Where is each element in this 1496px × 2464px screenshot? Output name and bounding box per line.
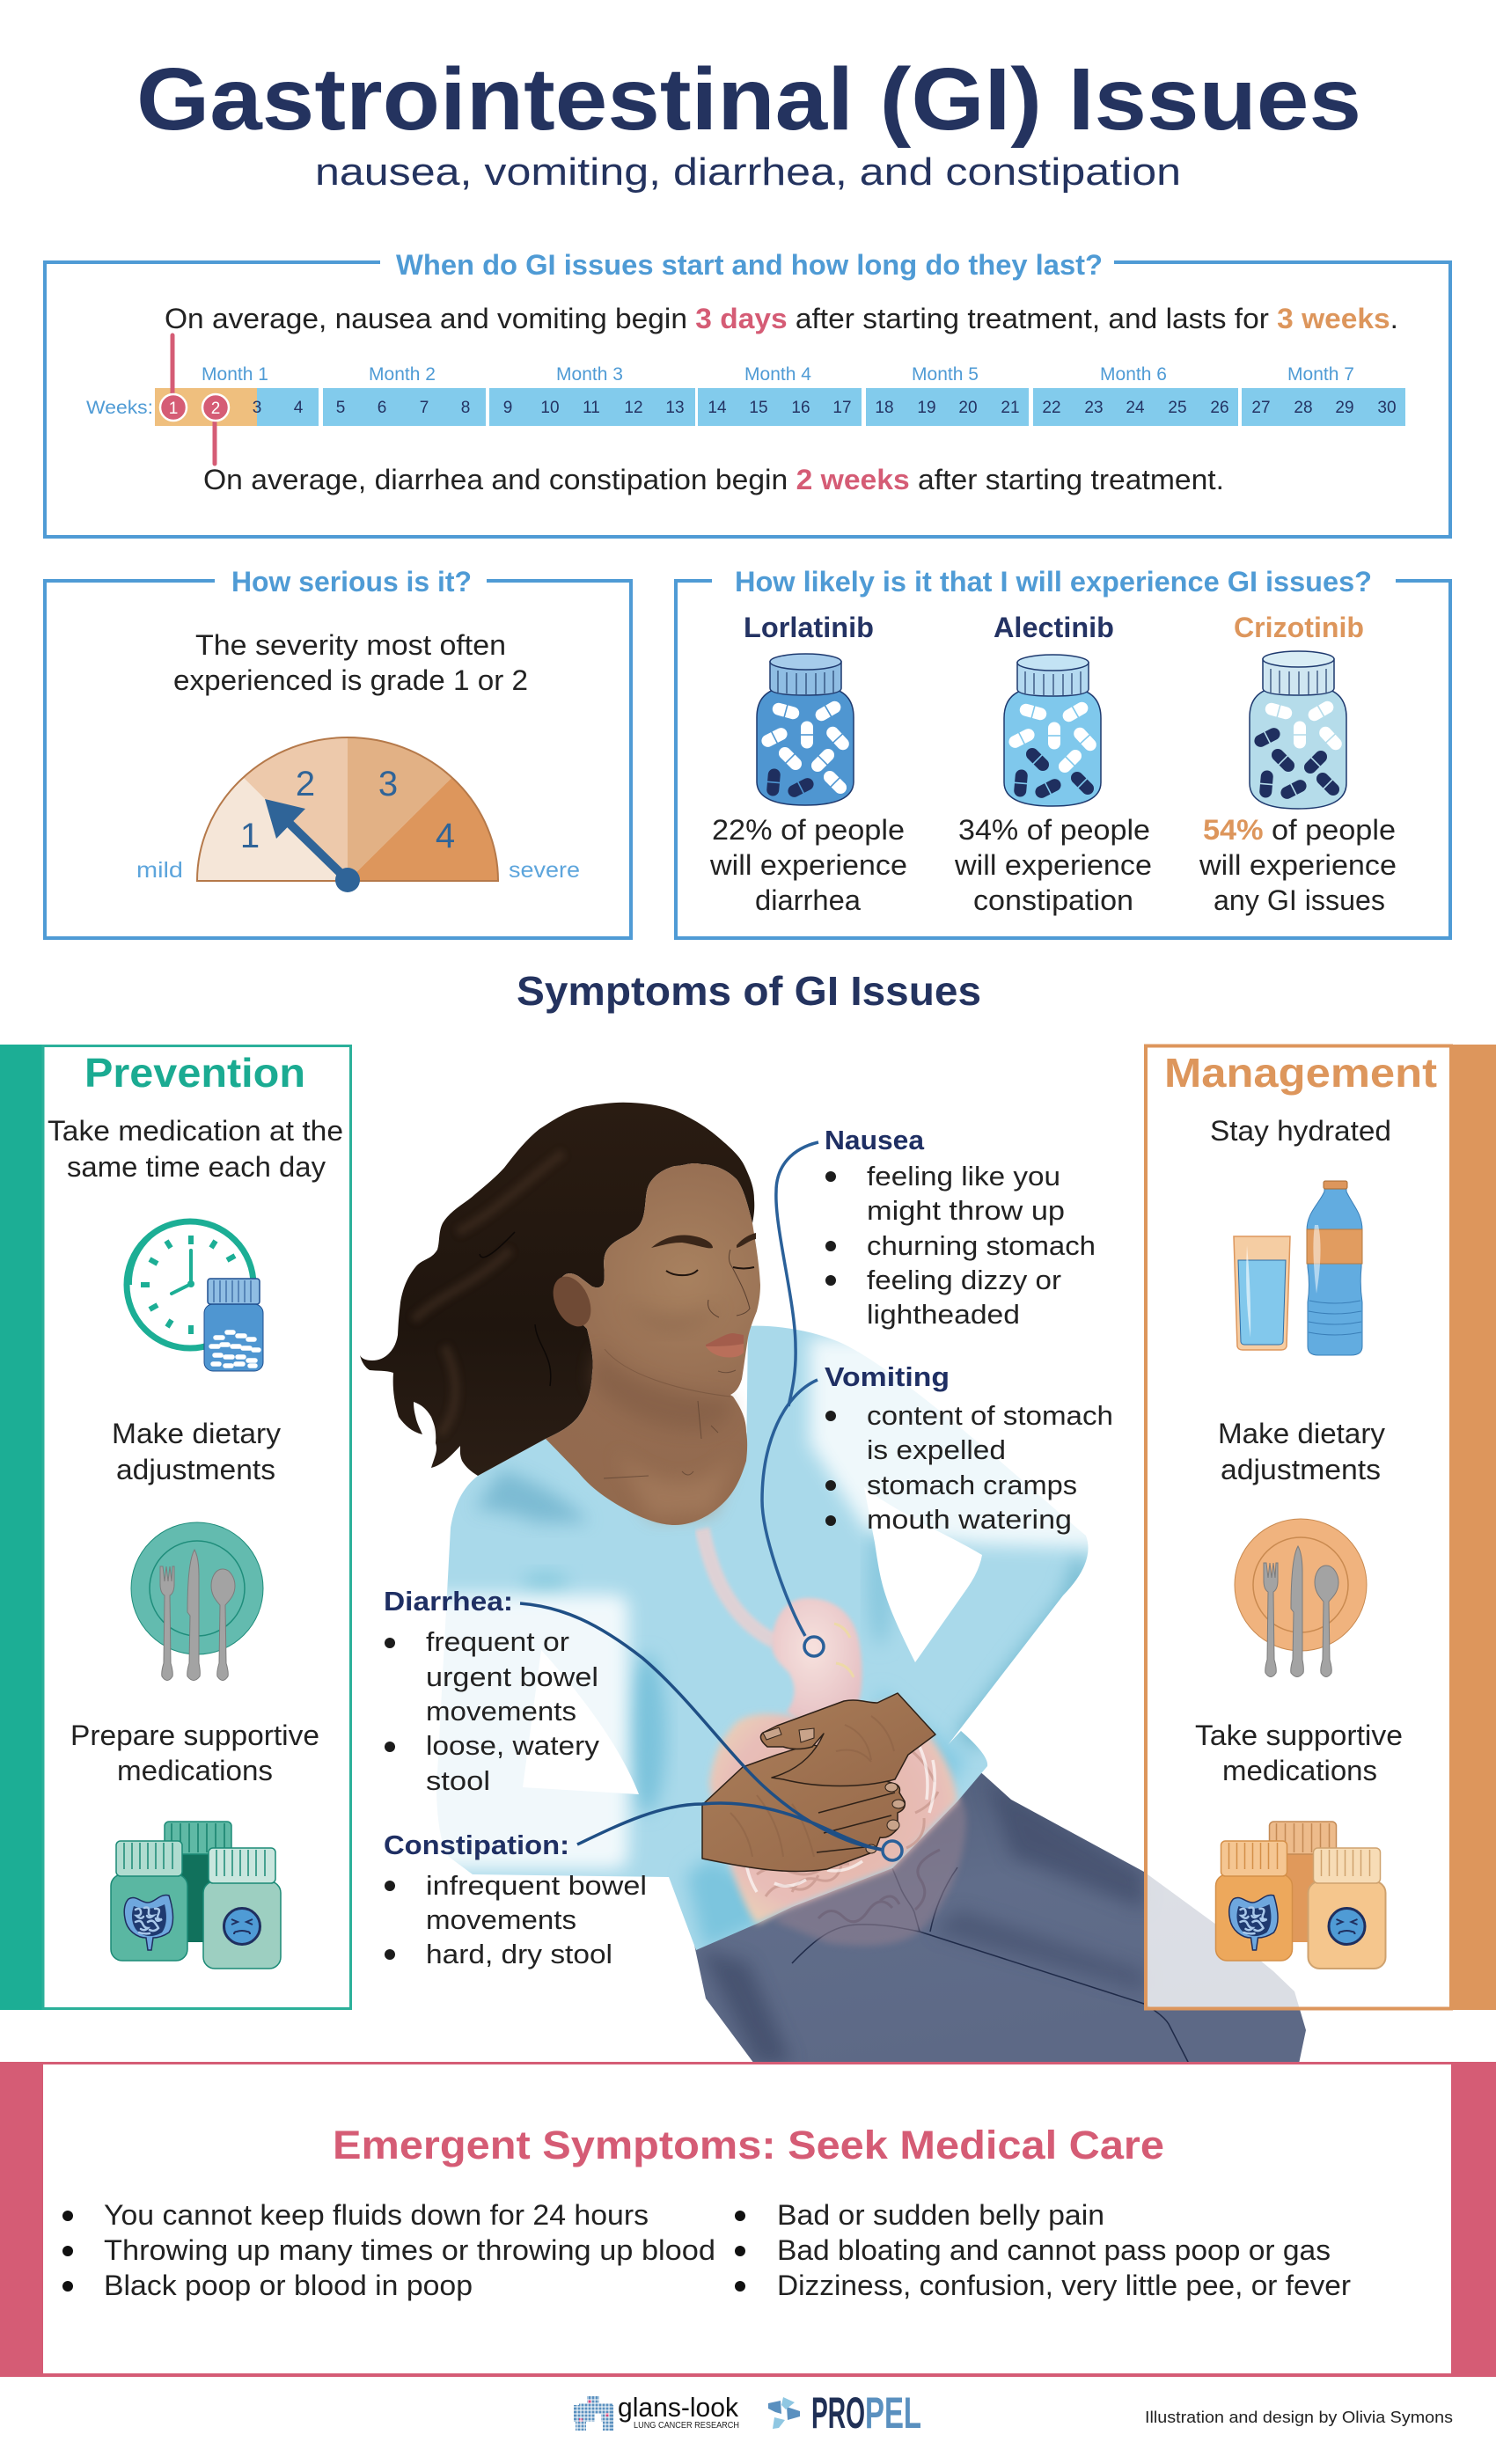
icon: medication bottles [111, 1822, 281, 1969]
heading: emergent symptoms: Emergent Symptoms: Seek Medical Care [333, 2123, 1164, 2167]
timeline bar: 23 [1084, 399, 1104, 417]
text: dietary: adjustments [116, 1454, 275, 1485]
callout: constipation [384, 1830, 647, 1969]
text: nausea timing: On average, nausea and vomiting begin 3 days after starting treatment, and lasts for 3 weeks. [165, 303, 1398, 334]
timeline bar: Month 4 [744, 364, 811, 385]
timeline bar: 28 [1294, 399, 1313, 417]
icon: plate and cutlery [131, 1522, 263, 1681]
text: supportive medications: Take supportive [1195, 1720, 1403, 1751]
subtitle: nausea, vomiting, diarrhea, and constipation [315, 150, 1181, 194]
list: right column: Bad or sudden belly pain [777, 2199, 1104, 2231]
drug column: Crizotinib: any GI issues [1214, 884, 1385, 916]
drug column: Alectinib: will experience [954, 849, 1152, 881]
callout: constipation: infrequent bowel [426, 1870, 647, 1901]
severity gauge: 2 [296, 765, 315, 803]
severity gauge: 1 [240, 817, 260, 855]
panel: management [1146, 1045, 1496, 2010]
illustration: woman with digestive organs [360, 1103, 1306, 2064]
drug column: Crizotinib [1199, 612, 1397, 916]
callout: diarrhea: frequent or [426, 1626, 569, 1657]
timeline bar: 9 [503, 399, 512, 417]
white gap between arm and torso [864, 1487, 982, 1662]
upper hand [760, 1693, 935, 1786]
text: stay hydrated: Stay hydrated [1210, 1115, 1391, 1147]
list: left column: Black poop or blood in poop [104, 2270, 473, 2301]
callout: nausea: might throw up [867, 1195, 1065, 1226]
title: Gastrointestinal (GI) Issues [136, 50, 1361, 149]
list: left column: Throwing up many times or throwing up blood [104, 2234, 715, 2266]
callout: nausea: churning stomach [867, 1230, 1096, 1261]
timeline bar: 10 [540, 399, 560, 417]
timeline bar: Month 7 [1287, 364, 1354, 385]
text: take medication: Take medication at the [48, 1115, 343, 1147]
drug column: Alectinib [954, 612, 1152, 916]
callout: vomiting: is expelled [867, 1434, 1006, 1465]
drug column: Alectinib: Alectinib [994, 612, 1114, 643]
drug column: Lorlatinib: diarrhea [755, 884, 861, 916]
timeline bar: Weeks: [86, 398, 153, 418]
drug column: Lorlatinib: 22% of people [712, 814, 905, 846]
panel: emergent symptoms [0, 2062, 1496, 2377]
icon: water glass and bottle [1234, 1181, 1362, 1355]
severity gauge: severe [509, 858, 580, 883]
white haze behind vomiting text [810, 1338, 1118, 1549]
text: supportive medications: Prepare supportive [70, 1720, 319, 1751]
icon: clock with pill bottle [127, 1221, 263, 1371]
text: dietary: Make dietary [112, 1418, 281, 1449]
callout: diarrhea: movements [426, 1696, 576, 1727]
logo: glans-look: glans-look [618, 2392, 738, 2423]
heading: management: Management [1164, 1050, 1437, 1096]
drug column: Alectinib: 34% of people [958, 814, 1150, 846]
timeline bar: 25 [1168, 399, 1187, 417]
timeline bar: 24 [1126, 399, 1145, 417]
timeline bar [86, 364, 1405, 426]
timeline bar: 22 [1042, 399, 1061, 417]
timeline bar: Month 2 [369, 364, 436, 385]
callout: diarrhea: urgent bowel [426, 1661, 598, 1692]
drug column: Crizotinib: Crizotinib [1234, 612, 1364, 643]
text: severity: The severity most often [195, 629, 506, 661]
panel: prevention [0, 1045, 350, 2010]
heading: how likely: How likely is it that I will experience GI issues? [735, 566, 1372, 598]
text: supportive medications: medications [117, 1755, 273, 1786]
text: supportive medications [1195, 1720, 1403, 1786]
drug column: Lorlatinib: Lorlatinib [744, 612, 874, 643]
marker: diarrhea begins [202, 394, 229, 464]
text: dietary: adjustments [1221, 1454, 1381, 1485]
logo: glans-look: LUNG CANCER RESEARCH [634, 2421, 739, 2431]
panel: how serious [45, 566, 631, 938]
text: take medication: same time each day [67, 1151, 326, 1183]
callout: diarrhea: stool [426, 1765, 490, 1796]
list: right column: Dizziness, confusion, very little pee, or fever [777, 2270, 1351, 2301]
timeline bar: 16 [791, 399, 810, 417]
timeline bar: 17 [832, 399, 852, 417]
callout: diarrhea: loose, watery [426, 1730, 600, 1761]
heading: timing: When do GI issues start and how long do they last? [396, 249, 1103, 281]
timeline bar: 13 [665, 399, 685, 417]
section heading: symptoms: Symptoms of GI Issues [517, 968, 981, 1014]
callout: constipation: movements [426, 1904, 576, 1935]
text: supportive medications [70, 1720, 319, 1786]
timeline bar: 14 [708, 399, 727, 417]
drug column: Lorlatinib: will experience [709, 849, 907, 881]
callout: nausea: lightheaded [867, 1299, 1020, 1330]
stomach [772, 1598, 862, 1724]
text: severity: experienced is grade 1 or 2 [173, 664, 528, 696]
timeline bar: 27 [1251, 399, 1271, 417]
white haze behind diarrhea text [414, 1595, 628, 1869]
callout: nausea [825, 1125, 1096, 1330]
timeline bar: 15 [749, 399, 768, 417]
shirt [436, 1326, 1091, 1950]
marker: diarrhea begins: 2 [211, 400, 220, 418]
timeline bar: 12 [624, 399, 643, 417]
list: left column: You cannot keep fluids down for 24 hours [104, 2199, 649, 2231]
text: dietary: Make dietary [1218, 1418, 1385, 1449]
timeline bar: 8 [461, 399, 470, 417]
severity gauge: 4 [436, 817, 455, 855]
timeline bar: 18 [875, 399, 894, 417]
callout: nausea: feeling dizzy or [867, 1265, 1061, 1295]
callout: vomiting [825, 1361, 1113, 1535]
callout: nausea: Nausea [825, 1125, 925, 1155]
logo: PROPEL [768, 2388, 921, 2438]
timeline bar: 30 [1377, 399, 1397, 417]
timeline bar: Month 6 [1100, 364, 1167, 385]
text: dietary [112, 1418, 281, 1485]
timeline bar: 3 [253, 399, 261, 417]
panel: how likely [676, 566, 1450, 938]
callout: vomiting: mouth watering [867, 1504, 1072, 1535]
text: dietary [1218, 1418, 1385, 1485]
callout: constipation: Constipation: [384, 1830, 569, 1860]
timeline bar: 29 [1335, 399, 1354, 417]
list: right column [735, 2199, 1351, 2301]
timeline bar: 26 [1210, 399, 1229, 417]
severity gauge [136, 737, 580, 892]
white gap beside left arm [523, 1650, 639, 1794]
list: left column [62, 2199, 715, 2301]
drug column: Lorlatinib [709, 612, 907, 916]
heading: prevention: Prevention [84, 1050, 305, 1096]
severity gauge: mild [136, 858, 183, 883]
panel: when do GI issues start [45, 249, 1450, 537]
lower hand [702, 1744, 905, 1872]
timeline bar: 19 [917, 399, 936, 417]
text: take medication [48, 1115, 343, 1183]
pants [694, 1772, 1306, 2062]
timeline bar: Month 3 [556, 364, 623, 385]
callout: diarrhea: Diarrhea: [384, 1586, 513, 1617]
hair [360, 1103, 754, 1476]
timeline bar: 7 [420, 399, 429, 417]
text: severity [173, 629, 528, 696]
icon: medication bottles [1216, 1822, 1385, 1969]
timeline bar: 11 [583, 399, 600, 417]
list: right column: Bad bloating and cannot pass poop or gas [777, 2234, 1331, 2266]
drug column: Crizotinib: 54% of people [1203, 814, 1396, 846]
icon: plate and cutlery [1235, 1519, 1367, 1677]
severity gauge: 3 [378, 765, 398, 803]
callout: diarrhea [384, 1586, 600, 1796]
credit: Illustration and design by Olivia Symons [1145, 2409, 1453, 2426]
marker: nausea begins [160, 335, 187, 421]
callout: vomiting: stomach cramps [867, 1470, 1077, 1500]
intestines [709, 1698, 957, 1924]
marker: nausea begins: 1 [169, 400, 178, 418]
logo: PROPEL: PEL [865, 2388, 921, 2438]
face and neck [546, 1163, 760, 1525]
callout: vomiting: content of stomach [867, 1400, 1113, 1431]
drug column: Alectinib: constipation [973, 884, 1133, 916]
text: diarrhea timing: On average, diarrhea and constipation begin 2 weeks after starting treatment. [203, 464, 1224, 495]
esophagus [702, 1529, 774, 1641]
timeline bar: 5 [336, 399, 345, 417]
timeline bar: 20 [958, 399, 978, 417]
logo: glans-look [574, 2392, 739, 2431]
drug column: Crizotinib: will experience [1199, 849, 1397, 881]
callout lines [520, 1142, 902, 1860]
text: supportive medications: medications [1222, 1755, 1377, 1786]
timeline bar: Month 1 [202, 364, 268, 385]
timeline bar: 21 [1001, 399, 1020, 417]
logo: PROPEL: PRO [811, 2388, 865, 2438]
organs showing through pants [774, 1786, 966, 1946]
heading: how serious: How serious is it? [231, 566, 472, 598]
callout: constipation: hard, dry stool [426, 1939, 612, 1969]
callout: nausea: feeling like you [867, 1161, 1060, 1192]
timeline bar: 6 [378, 399, 386, 417]
timeline bar: 4 [294, 399, 304, 417]
timeline bar: Month 5 [912, 364, 979, 385]
callout: vomiting: Vomiting [825, 1361, 950, 1392]
